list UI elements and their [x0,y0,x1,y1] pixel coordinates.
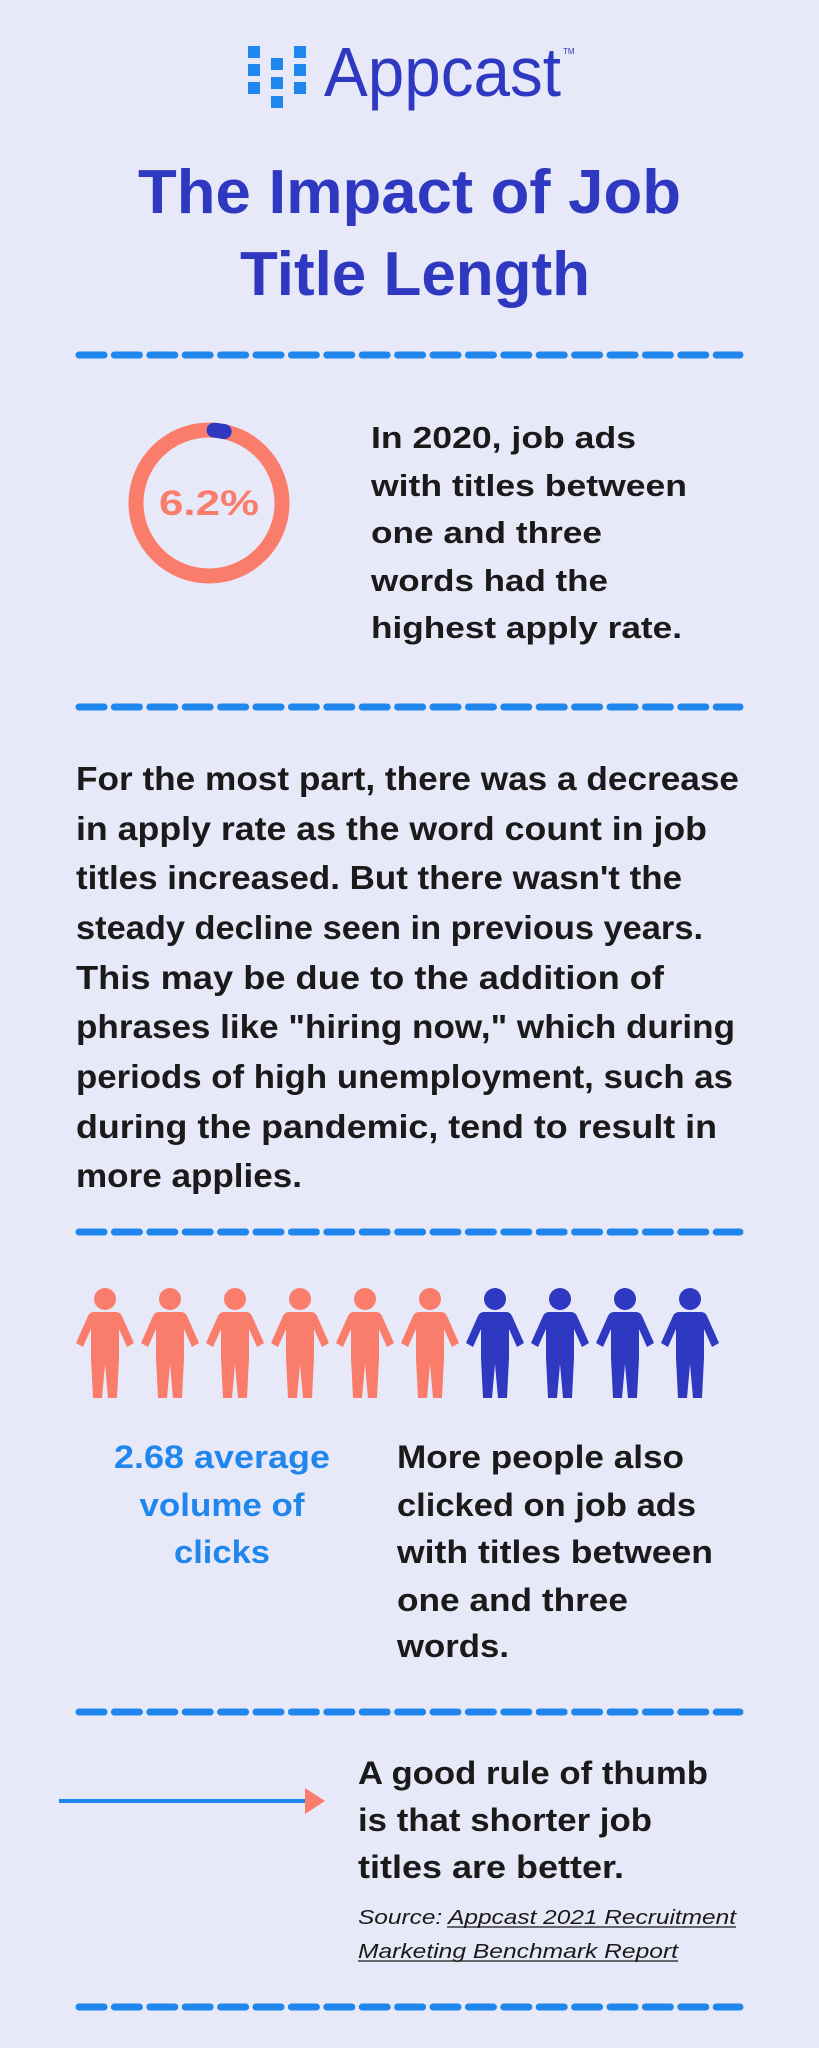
text: conclusion: A good rule of thumb [358,1755,708,1791]
source: Marketing Benchmark Report [358,1941,680,1963]
text: clicks: words. [396,1628,509,1664]
text: explanation paragraph: This may be due to the addition of [76,959,665,996]
text: explanation paragraph: in apply rate as the word count in job [76,810,707,847]
donut chart: 6.2%: 6.2% [159,484,259,523]
text: apply rate: In 2020, job ads [371,420,636,455]
donut chart: 6.2% [136,430,282,576]
text: apply rate: with titles between [370,468,687,503]
text: explanation paragraph: titles increased. But there wasn't the [76,859,682,896]
text: explanation paragraph: during the pandemic, tend to result in [76,1108,717,1145]
text: clicks: More people also [397,1439,684,1475]
text: clicks: with titles between [396,1534,713,1570]
icon: logo squares [248,46,306,108]
text: explanation paragraph [76,760,739,1194]
text: conclusion: titles are better. [358,1849,624,1885]
text: explanation paragraph: steady decline seen in previous years. [76,909,703,946]
title [138,158,681,309]
text: clicks: one and three [397,1582,628,1618]
text: conclusion: is that shorter job [358,1802,652,1838]
text: apply rate: highest apply rate. [371,610,682,645]
source [358,1907,738,1963]
text: explanation paragraph: periods of high unemployment, such as [76,1058,733,1095]
source: Source: Appcast 2021 Recruitment [358,1907,738,1929]
logo: Appcast [324,33,561,111]
text: clicks: clicked on job ads [397,1487,696,1523]
text: conclusion [358,1755,708,1885]
stat: 2.68 clicks: volume of [140,1487,305,1523]
text: explanation paragraph: phrases like "hiring now," which during [76,1008,735,1045]
arrow [59,1788,325,1814]
title: Title Length [240,240,590,309]
text: apply rate [370,420,687,645]
stat: 2.68 clicks: 2.68 average [114,1439,330,1475]
title: The Impact of Job [138,158,681,227]
stat: 2.68 clicks [114,1439,330,1570]
text: explanation paragraph: For the most part, there was a decrease [76,760,739,797]
stat: 2.68 clicks: clicks [174,1534,270,1570]
logo: TM [563,47,575,56]
text: apply rate: words had the [370,563,608,598]
text: clicks [396,1439,713,1664]
text: apply rate: one and three [371,515,602,550]
text: explanation paragraph: more applies. [76,1157,302,1194]
icon row: people [76,1288,719,1398]
